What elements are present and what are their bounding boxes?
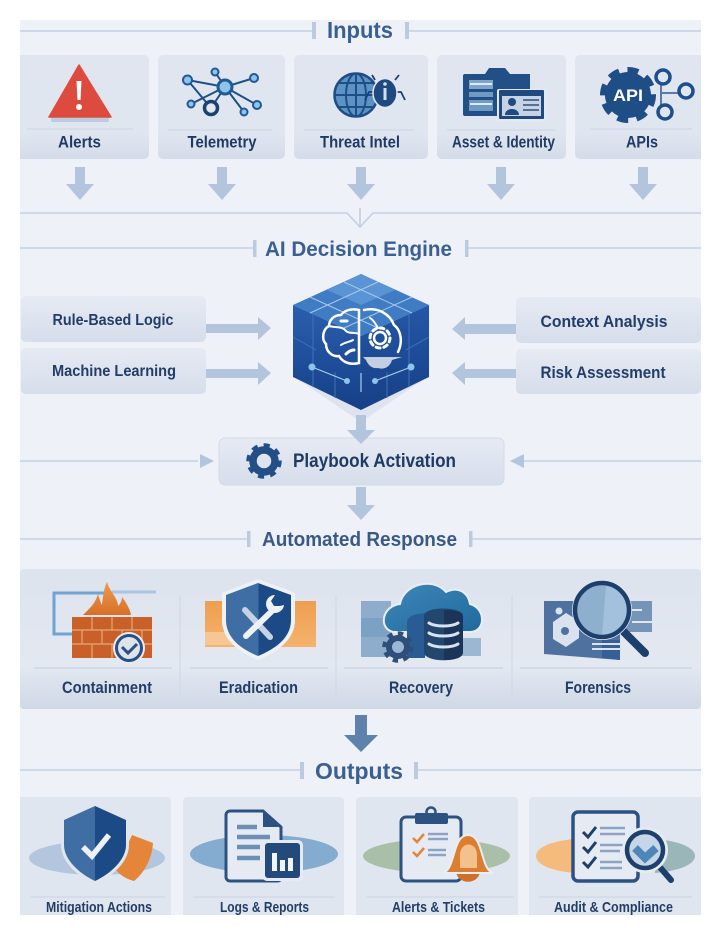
label: Eradication: Eradication [219, 678, 298, 697]
icon: warning triangle [49, 65, 111, 122]
box: Risk Assessment [516, 349, 701, 394]
arrows: inputs flowing down [66, 167, 657, 200]
box: Machine Learning [21, 348, 206, 394]
box: Rule-Based Logic: Rule-Based Logic [52, 312, 174, 329]
label: Forensics: Forensics [565, 678, 631, 697]
box: Risk Assessment: Risk Assessment [540, 363, 666, 382]
heading: AI Decision Engine: AI Decision Engine [265, 238, 452, 261]
icon: document and chart [190, 811, 338, 881]
arrow: playbook to response [347, 487, 375, 520]
heading: Automated Response [20, 529, 701, 551]
panel: Alerts and Tickets output [356, 797, 518, 916]
icon: network nodes [183, 68, 261, 116]
panel: Automated Response band [20, 569, 701, 709]
brain glyph [323, 309, 401, 364]
label: Alerts and Tickets: Alerts & Tickets [392, 899, 485, 916]
side arrows into playbook [20, 454, 701, 468]
label: Mitigation Actions: Mitigation Actions [46, 899, 152, 916]
box: Playbook Activation [219, 438, 504, 485]
bottom white margin [0, 915, 721, 935]
icon: gear [248, 446, 280, 476]
panel: Telemetry input [158, 55, 285, 159]
heading: AI Decision Engine [20, 238, 701, 261]
item: Forensics [544, 580, 652, 697]
label: Recovery: Recovery [389, 678, 453, 697]
label: Threat Intel: Threat Intel [320, 134, 400, 152]
panel: Threat Intel input [294, 55, 428, 159]
panel: Audit and Compliance output [529, 797, 701, 916]
arrow: response to outputs [344, 715, 378, 752]
heading: Inputs: Inputs [327, 17, 393, 43]
label: Asset and Identity: Asset & Identity [452, 134, 556, 152]
label: Logs and Reports: Logs & Reports [220, 899, 309, 916]
panel: Alerts input [20, 55, 149, 159]
icon: firewall with flame [54, 582, 156, 664]
panel: Asset and Identity input [437, 55, 566, 159]
box: Machine Learning: Machine Learning [52, 363, 176, 380]
icon: shield with wrench [205, 579, 316, 660]
label: Telemetry: Telemetry [188, 134, 257, 152]
label: Audit and Compliance: Audit & Compliance [554, 899, 673, 916]
label: Containment: Containment [62, 678, 152, 697]
box: Context Analysis: Context Analysis [540, 312, 668, 331]
connector: merge bar into engine [20, 208, 701, 227]
item: Recovery [361, 584, 482, 697]
icon: API gear and nodes: API [613, 86, 643, 105]
arrow: engine to playbook [347, 415, 375, 444]
box: Context Analysis [516, 297, 701, 343]
icon: cloud database and gear [361, 584, 482, 660]
heading: Outputs [20, 758, 701, 784]
panel: Logs and Reports output [183, 797, 344, 916]
heading: Automated Response: Automated Response [262, 529, 457, 551]
icon: globe and bug [334, 73, 405, 117]
arrows: logic into engine [206, 317, 516, 385]
heading: Outputs: Outputs [315, 758, 403, 784]
icon: checklist and magnifier [536, 812, 695, 881]
icon: AI cube with brain [293, 274, 429, 422]
panel: APIs input [575, 55, 701, 159]
icon: folder and ID card [463, 68, 546, 121]
box: Rule-Based Logic [21, 296, 206, 342]
item: Eradication [205, 579, 316, 697]
item: Containment [54, 582, 156, 697]
icon: clipboard and bell [363, 808, 510, 882]
panel: Mitigation Actions output [20, 797, 171, 916]
label: Alerts: Alerts [58, 134, 101, 152]
box: Playbook Activation: Playbook Activation [293, 451, 456, 472]
heading: Inputs [20, 17, 701, 43]
label: APIs: APIs [626, 134, 658, 152]
icon: magnifier over evidence [544, 580, 652, 660]
icon: shield with check [29, 804, 165, 884]
